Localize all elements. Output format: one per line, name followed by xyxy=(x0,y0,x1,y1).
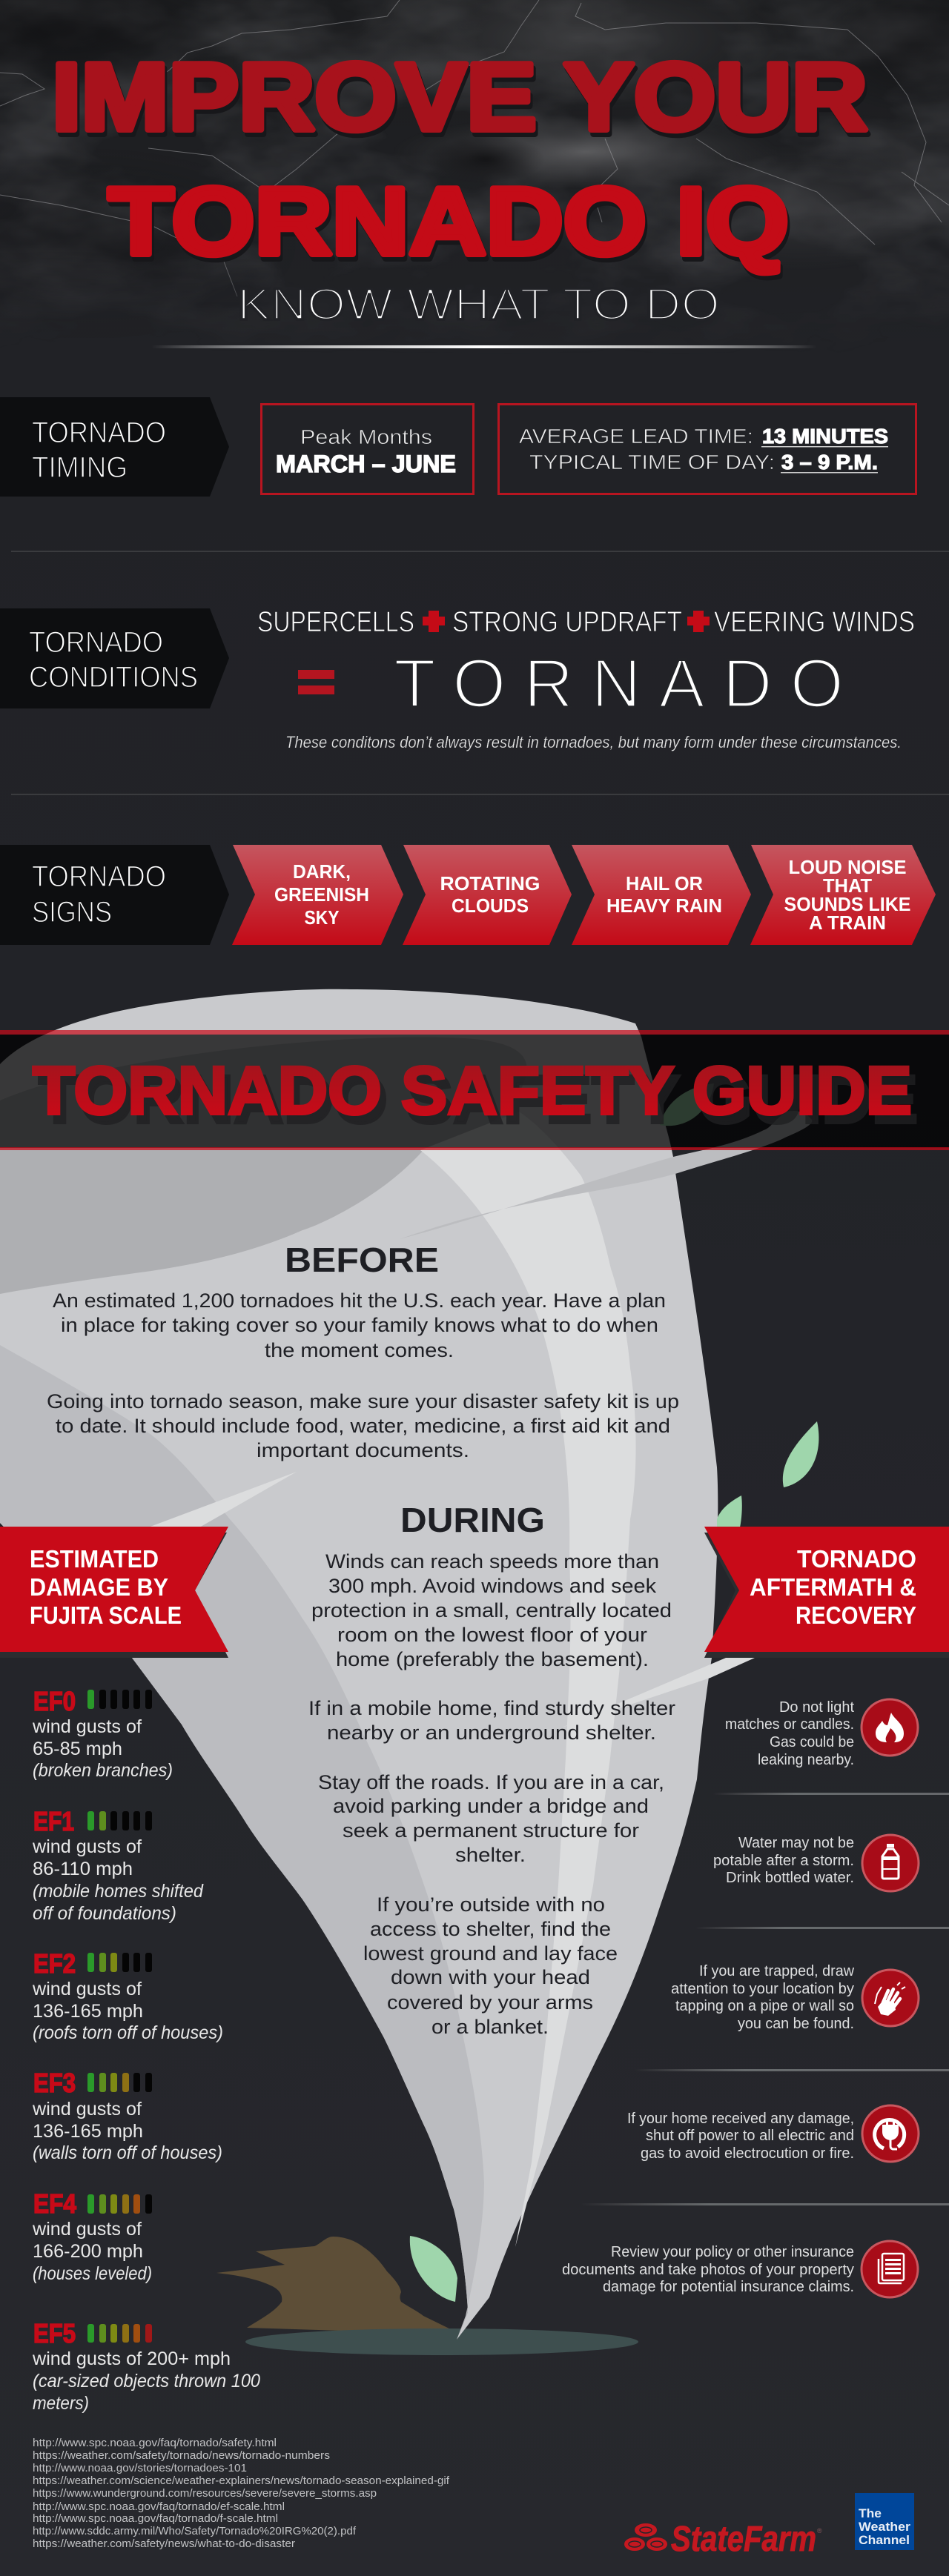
box: lead time and time of day: TYPICAL TIME OF DAY: xyxy=(529,451,775,474)
icon: bottle xyxy=(862,1835,919,1891)
divider xyxy=(581,2203,949,2205)
sign 4: LOUD NOISE xyxy=(789,856,906,878)
leaf right xyxy=(783,1421,819,1487)
heading: before: BEFORE xyxy=(285,1241,439,1279)
sign 1: SKY xyxy=(304,906,340,929)
sources: http://www.spc.noaa.gov/faq/tornado/ef-scale.html xyxy=(33,2501,285,2513)
icon: clapping hands xyxy=(862,1970,919,2026)
funnel upper shade xyxy=(0,1037,527,1294)
during paragraph 4 xyxy=(363,1893,618,2038)
sign 1 xyxy=(232,845,403,945)
sign 3 xyxy=(572,845,751,945)
before paragraph 2: to date. It should include food, water, medicine, a first aid kit and xyxy=(56,1415,670,1437)
sign 2 xyxy=(403,845,572,945)
EF3: EF3 xyxy=(33,2068,76,2098)
tag: tornado conditions xyxy=(0,608,229,708)
item: trapped: If you are trapped, draw xyxy=(699,1963,855,1979)
during paragraph 3: avoid parking under a bridge and xyxy=(333,1795,649,1817)
sign 1: GREENISH xyxy=(274,883,369,906)
leaf near ground xyxy=(410,2236,457,2302)
before section xyxy=(47,1241,679,1461)
section: tornado conditions xyxy=(0,606,915,751)
during paragraph 1: home (preferably the basement). xyxy=(336,1648,649,1670)
item: water: Water may not be xyxy=(738,1835,854,1851)
heading: during: DURING xyxy=(400,1501,545,1539)
sign 3: HAIL OR xyxy=(626,872,703,894)
sources: https://weather.com/safety/tornado/news/tornado-numbers xyxy=(33,2450,330,2462)
EF5: (car-sized objects thrown 100 xyxy=(33,2371,260,2391)
EF0: wind gusts of xyxy=(32,1716,142,1737)
EF1: (mobile homes shifted xyxy=(33,1881,204,1902)
box: lead time and time of day xyxy=(498,405,916,494)
divider xyxy=(695,1927,949,1929)
icon: plug xyxy=(862,2105,919,2162)
logo: state farm xyxy=(624,2520,822,2559)
before paragraph 1: An estimated 1,200 tornadoes hit the U.S. each year. Have a plan xyxy=(53,1289,666,1312)
during paragraph 4: If you’re outside with no xyxy=(377,1893,605,1916)
item: water xyxy=(713,1835,919,1891)
during paragraph 1 xyxy=(311,1550,672,1670)
during paragraph 1: room on the lowest floor of your xyxy=(337,1624,647,1646)
icon: documents xyxy=(862,2241,918,2297)
storm clouds xyxy=(0,0,949,296)
during paragraph 1: 300 mph. Avoid windows and seek xyxy=(328,1575,657,1597)
fujita scale list xyxy=(32,1686,260,2414)
sign 4 xyxy=(750,845,936,945)
sign 2: CLOUDS xyxy=(452,894,529,917)
item: water: Drink bottled water. xyxy=(726,1870,854,1886)
logo: the weather channel: Channel xyxy=(859,2533,910,2547)
EF4: 166-200 mph xyxy=(33,2241,143,2262)
during section xyxy=(308,1501,675,2038)
EF2 xyxy=(32,1948,223,2043)
item: trapped xyxy=(671,1963,919,2032)
item: insurance: damage for potential insurance claims. xyxy=(603,2279,854,2295)
EF1: off of foundations) xyxy=(33,1903,176,1924)
during paragraph 4: or a blanket. xyxy=(431,2016,549,2038)
item: power: gas to avoid electrocution or fire. xyxy=(641,2145,854,2162)
meter EF2 xyxy=(87,1953,152,1972)
during paragraph 3: Stay off the roads. If you are in a car, xyxy=(318,1771,664,1793)
before paragraph 1: the moment comes. xyxy=(265,1339,454,1361)
before paragraph 1 xyxy=(53,1289,666,1361)
EF5 xyxy=(32,2318,260,2414)
tag: tornado signs: TORNADO xyxy=(32,860,166,893)
item: trapped: tapping on a pipe or wall so xyxy=(675,1998,854,2014)
banner: tornado safety guide: TORNADO SAFETY GUIDE xyxy=(33,1053,912,1129)
sources: https://www.wunderground.com/resources/severe/severe_storms.asp xyxy=(33,2488,377,2500)
formula line: VEERING WINDS xyxy=(714,606,915,638)
item: power: shut off power to all electric and xyxy=(646,2128,854,2144)
meter EF3 xyxy=(87,2073,152,2092)
sources: http://www.spc.noaa.gov/faq/tornado/safety.html xyxy=(33,2437,277,2449)
ground shadow xyxy=(245,2328,638,2355)
wisp left xyxy=(148,1472,297,1527)
funnel light streak xyxy=(420,1112,636,2247)
tag: tornado timing: TORNADO xyxy=(32,416,166,449)
item: insurance: documents and take photos of your property xyxy=(562,2262,854,2278)
tag: tornado conditions: CONDITIONS xyxy=(29,661,198,694)
ground dirt xyxy=(216,2237,460,2334)
sign 1: DARK, xyxy=(293,860,351,883)
EF5: wind gusts of 200+ mph xyxy=(32,2348,231,2369)
sources: https://weather.com/safety/news/what-to-do-disaster xyxy=(33,2538,295,2550)
EF4: (houses leveled) xyxy=(33,2263,152,2284)
wisp right xyxy=(562,1658,755,1727)
item: power: If your home received any damage, xyxy=(627,2111,854,2127)
EF4: wind gusts of xyxy=(32,2219,142,2240)
divider xyxy=(635,2069,949,2071)
logo: state farm: ® xyxy=(817,2527,822,2534)
banner: tornado safety guide xyxy=(0,1030,949,1150)
EF1: EF1 xyxy=(33,1806,74,1836)
icon: flame xyxy=(862,1699,918,1756)
item: insurance: Review your policy or other insurance xyxy=(611,2244,854,2260)
sign 4: A TRAIN xyxy=(809,912,886,934)
item: trapped: attention to your location by xyxy=(671,1981,854,1997)
formula line: SUPERCELLS xyxy=(257,606,414,638)
logo: the weather channel xyxy=(855,2493,914,2550)
divider xyxy=(713,1793,949,1795)
ribbon: estimated damage: DAMAGE BY xyxy=(30,1573,168,1601)
item: gas xyxy=(725,1699,918,1768)
logo: state farm: StateFarm xyxy=(671,2520,816,2559)
title xyxy=(52,44,870,279)
funnel body xyxy=(0,989,718,2340)
EF3 xyxy=(32,2068,222,2163)
title line 2: TORNADO IQ xyxy=(110,173,791,279)
EF0: (broken branches) xyxy=(33,1760,173,1781)
icon: equals xyxy=(298,670,334,694)
ribbon: aftermath: TORNADO xyxy=(797,1545,916,1573)
meter EF0 xyxy=(87,1690,152,1709)
EF2: (roofs torn off of houses) xyxy=(33,2022,223,2043)
EF4 xyxy=(32,2188,152,2284)
item: insurance xyxy=(562,2241,918,2297)
item: gas: leaking nearby. xyxy=(758,1752,854,1768)
tag: tornado timing: TIMING xyxy=(32,451,128,484)
EF0: 65-85 mph xyxy=(33,1739,122,1759)
during paragraph 1: protection in a small, centrally located xyxy=(311,1599,672,1621)
EF0: EF0 xyxy=(33,1686,76,1716)
logo: the weather channel: The xyxy=(859,2506,882,2520)
sources xyxy=(33,2437,450,2550)
section: tornado signs xyxy=(0,845,936,945)
box: lead time and time of day: AVERAGE LEAD TIME: xyxy=(519,425,753,448)
EF3: (walls torn off of houses) xyxy=(33,2142,222,2163)
sign 2: ROTATING xyxy=(440,872,540,894)
EF5: EF5 xyxy=(33,2318,76,2348)
title divider xyxy=(151,345,817,348)
aftermath list xyxy=(562,1699,949,2297)
formula line: STRONG UPDRAFT xyxy=(452,606,682,638)
during paragraph 2: If in a mobile home, find sturdy shelter xyxy=(308,1697,675,1719)
leaf in band xyxy=(660,1083,714,1126)
subtitle: KNOW WHAT TO DO xyxy=(237,279,720,329)
EF1: 86-110 mph xyxy=(33,1859,133,1879)
note: These conditons don’t always result in tornadoes, but many form under these circumstances. xyxy=(285,733,902,751)
title line 1: IMPROVE YOUR xyxy=(54,48,870,155)
during paragraph 2 xyxy=(308,1697,675,1744)
banner: tornado safety guide: TORNADO SAFETY GUIDE xyxy=(39,1062,918,1138)
tag: tornado timing xyxy=(0,397,229,497)
logo: the weather channel: Weather xyxy=(859,2520,910,2534)
sign 4: SOUNDS LIKE xyxy=(784,893,910,915)
EF3: wind gusts of xyxy=(32,2099,142,2119)
item: gas: matches or candles. xyxy=(725,1716,854,1733)
sources: http://www.noaa.gov/stories/tornadoes-101 xyxy=(33,2463,247,2474)
ribbon: aftermath xyxy=(704,1527,949,1658)
icon: plus xyxy=(687,611,710,632)
EF1: wind gusts of xyxy=(32,1836,142,1857)
big word: tornado: TORNADO xyxy=(394,645,844,722)
EF5: meters) xyxy=(33,2393,89,2414)
ribbon: estimated damage xyxy=(0,1527,228,1658)
during paragraph 4: down with your head xyxy=(391,1966,590,1988)
before paragraph 1: in place for taking cover so your family knows what to do when xyxy=(61,1314,658,1336)
ribbon: aftermath: RECOVERY xyxy=(796,1601,916,1629)
during paragraph 4: lowest ground and lay face xyxy=(363,1942,618,1965)
tag: tornado conditions: TORNADO xyxy=(29,626,163,659)
box: peak months: MARCH – JUNE xyxy=(276,451,456,477)
ribbon: estimated damage: ESTIMATED xyxy=(30,1545,159,1573)
during paragraph 4: covered by your arms xyxy=(387,1991,593,2014)
tag: tornado signs xyxy=(0,845,229,945)
box: lead time and time of day: 13 MINUTES xyxy=(762,425,888,448)
sign 4: THAT xyxy=(823,874,872,897)
box: lead time and time of day: 3 – 9 P.M. xyxy=(781,451,878,474)
tag: tornado signs: SIGNS xyxy=(32,896,112,929)
item: gas: Do not light xyxy=(779,1699,854,1716)
EF3: 136-165 mph xyxy=(33,2121,143,2142)
during paragraph 1: Winds can reach speeds more than xyxy=(325,1550,659,1573)
title line 2: TORNADO IQ xyxy=(108,168,789,275)
EF2: wind gusts of xyxy=(32,1979,142,1999)
EF0 xyxy=(32,1686,173,1781)
EF4: EF4 xyxy=(33,2188,76,2219)
item: gas: Gas could be xyxy=(770,1734,854,1750)
sign 3: HEAVY RAIN xyxy=(606,894,722,917)
during paragraph 3: seek a permanent structure for xyxy=(343,1819,639,1842)
wisp upper right xyxy=(400,1111,812,1239)
during paragraph 3 xyxy=(318,1771,664,1866)
funnel lower left shade xyxy=(0,1345,484,2340)
meter EF1 xyxy=(87,1811,152,1830)
leaf behind banner xyxy=(717,1496,742,1534)
before paragraph 2: important documents. xyxy=(257,1439,469,1461)
ribbon: estimated damage: FUJITA SCALE xyxy=(30,1601,182,1629)
during paragraph 4: access to shelter, find the xyxy=(370,1918,611,1940)
EF1 xyxy=(32,1806,204,1924)
meter EF5 xyxy=(87,2324,152,2343)
title line 1: IMPROVE YOUR xyxy=(52,44,867,150)
ribbon: aftermath: AFTERMATH & xyxy=(750,1573,916,1601)
box: peak months xyxy=(261,405,473,494)
EF2: 136-165 mph xyxy=(33,2001,143,2022)
item: power xyxy=(627,2105,919,2162)
icon: plus xyxy=(423,611,445,632)
meter EF4 xyxy=(87,2194,152,2214)
EF2: EF2 xyxy=(33,1948,76,1979)
sources: https://weather.com/science/weather-explainers/news/tornado-season-explained-gif xyxy=(33,2475,450,2487)
sources: http://www.spc.noaa.gov/faq/tornado/f-scale.html xyxy=(33,2513,278,2525)
formula line xyxy=(257,606,915,638)
during paragraph 2: nearby or an underground shelter. xyxy=(327,1722,656,1744)
before paragraph 2: Going into tornado season, make sure your disaster safety kit is up xyxy=(47,1390,679,1413)
item: trapped: you can be found. xyxy=(738,2016,854,2032)
before paragraph 2 xyxy=(47,1390,679,1461)
sources: http://www.sddc.army.mil/Who/Safety/Tornado%20IRG%20(2).pdf xyxy=(33,2526,357,2537)
box: peak months: Peak Months xyxy=(300,425,432,448)
section: tornado timing xyxy=(0,397,916,497)
during paragraph 3: shelter. xyxy=(455,1844,526,1866)
tornado illustration xyxy=(0,989,819,2355)
item: water: potable after a storm. xyxy=(713,1853,854,1869)
